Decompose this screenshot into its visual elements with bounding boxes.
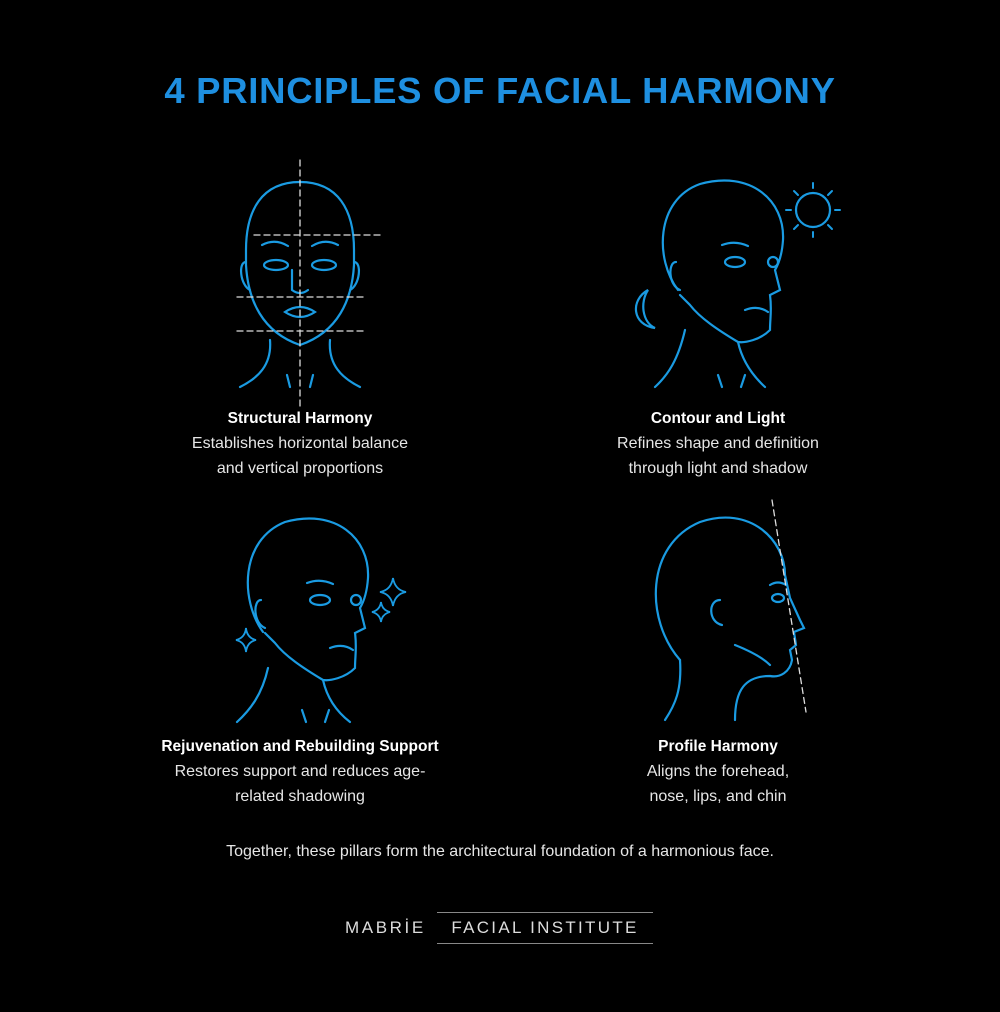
text block: profile harmony: Aligns the forehead, [647,763,789,780]
text block: contour and light: through light and shadow [629,460,807,477]
text block: rejuvenation: Restores support and reduces age- [175,763,425,780]
text block: structural harmony: and vertical proportions [217,460,383,477]
caption: Together, these pillars form the architectural foundation of a harmonious face. [226,843,774,860]
title: 4 PRINCIPLES OF FACIAL HARMONY [164,70,836,111]
logo: MABRİE [345,918,426,937]
logo [345,912,653,944]
icon: face with sparkles [236,519,406,722]
text block: contour and light [617,410,819,477]
text block: profile harmony: Profile Harmony [658,738,778,755]
icon: front face structural [237,160,382,410]
logo: FACIAL INSTITUTE [451,918,639,937]
text block: contour and light: Contour and Light [651,410,785,427]
text block: profile harmony [646,738,789,805]
text block: profile harmony: nose, lips, and chin [650,788,786,805]
text block: rejuvenation: related shadowing [235,788,365,805]
text block: structural harmony: Structural Harmony [228,410,372,427]
text block: rejuvenation: Rejuvenation and Rebuilding Support [161,738,439,755]
text block: contour and light: Refines shape and definition [617,435,819,452]
text block: structural harmony [192,410,408,477]
icon: three-quarter face with sun and moon [636,181,840,387]
text block: rejuvenation [161,738,439,805]
text block: structural harmony: Establishes horizontal balance [192,435,408,452]
icon: profile face [656,500,806,720]
